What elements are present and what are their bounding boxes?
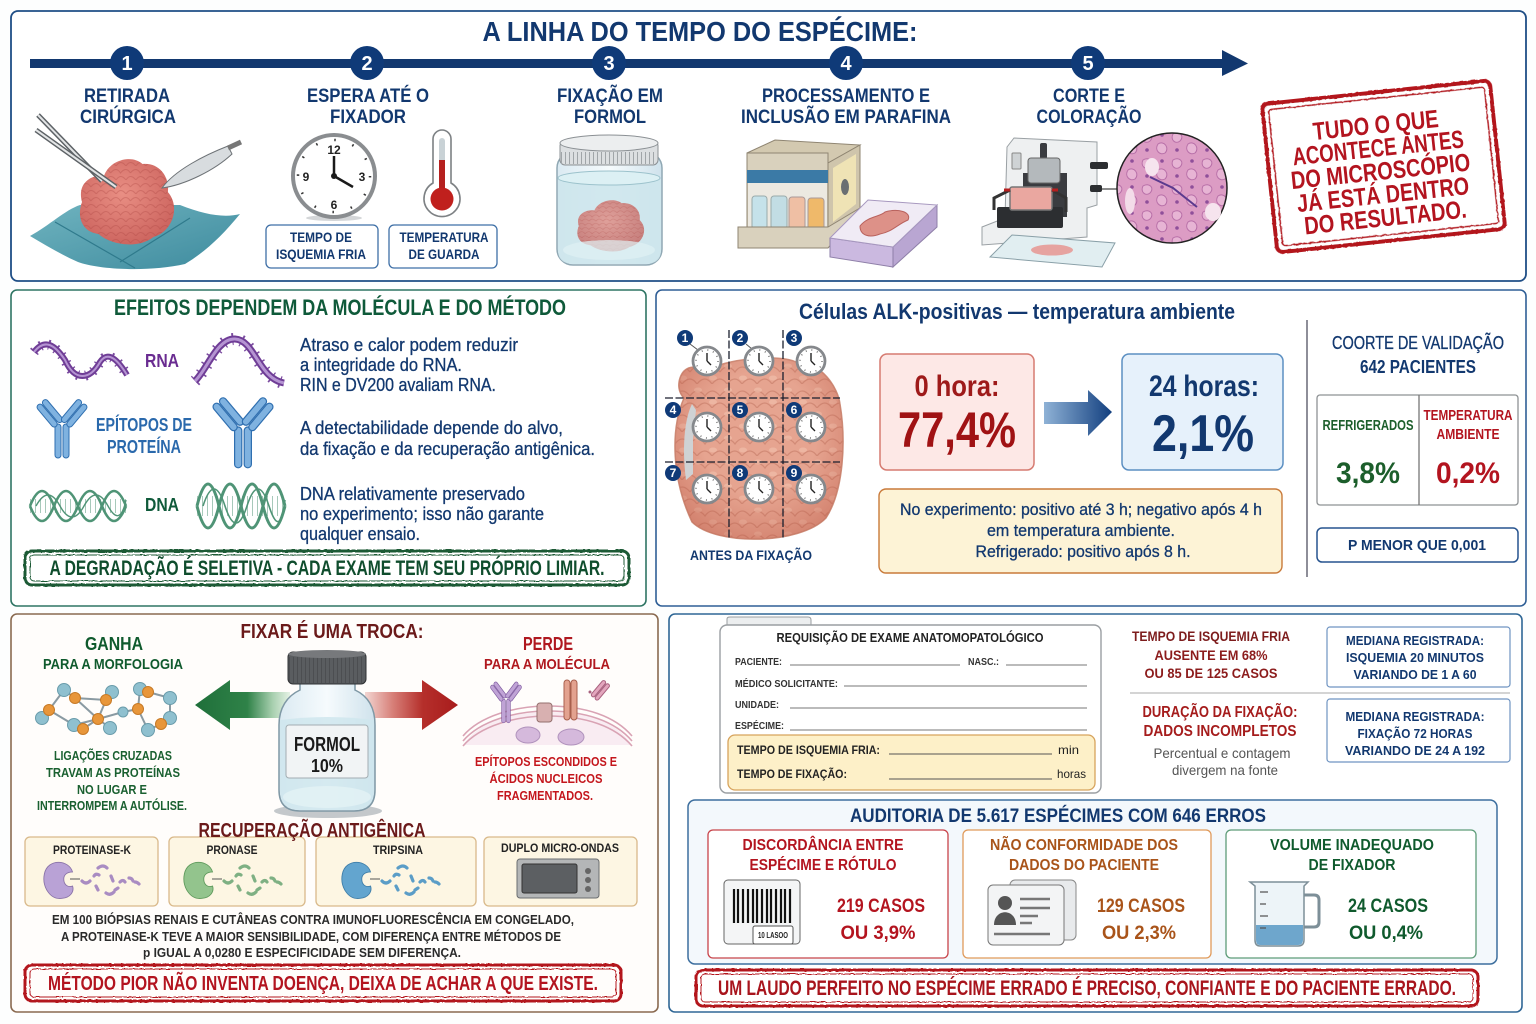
cohort table: 3,8% <box>1336 457 1400 490</box>
text: DNA <box>300 484 544 544</box>
stat: 0 hora <box>880 354 1034 470</box>
card: não conformidade <box>963 830 1211 958</box>
text: ligações cruzadas: INTERROMPEM A AUTÓLISE. <box>37 798 187 813</box>
text: ligações cruzadas: LIGAÇÕES CRUZADAS <box>54 748 172 763</box>
step 4 number: 4 <box>840 53 852 75</box>
text: study: p IGUAL A 0,0280 E ESPECIFICIDADE SEM DIFERENÇA. <box>143 945 461 960</box>
text: epítopos: A detectabilidade depende do alvo, <box>300 418 563 438</box>
arrow: red <box>365 680 458 730</box>
icon: RNA short <box>34 344 127 376</box>
card: discordância: 219 CASOS <box>837 896 925 917</box>
heading: EFEITOS DEPENDEM DA MOLÉCULA E DO MÉTODO <box>114 295 566 320</box>
banner: método pior <box>25 965 621 1001</box>
icon: formalin bottle <box>274 650 382 818</box>
text: ligações cruzadas: TRAVAM AS PROTEÍNAS <box>46 765 180 780</box>
heading: recuperação antigênica: RECUPERAÇÃO ANTIGÊNICA <box>198 818 426 842</box>
card: tripsina: TRIPSINA <box>373 843 423 857</box>
icon: microtome with slide <box>982 138 1118 267</box>
heading: ganha: GANHA <box>85 634 143 654</box>
requisition form: TEMPO DE FIXAÇÃO: <box>737 766 847 781</box>
icon: DNA short <box>30 491 126 521</box>
step 5 label: COLORAÇÃO <box>1036 106 1142 128</box>
text: isquemia ausente <box>1132 628 1290 681</box>
stat: 24 horas: 2,1% <box>1152 405 1254 463</box>
icon: tissue processor and paraffin block <box>738 140 937 267</box>
label: epítopos de proteína: EPÍTOPOS DE <box>96 414 192 435</box>
requisition form <box>720 617 1101 793</box>
note box: No experimento: positivo até 3 h; negativo após 4 h <box>900 500 1262 519</box>
card: proteinase-K <box>25 837 158 906</box>
text: epítopos escondidos: FRAGMENTADOS. <box>497 788 593 803</box>
card: duplo micro-ondas <box>484 837 637 906</box>
step 4 label: INCLUSÃO EM PARAFINA <box>741 106 951 128</box>
text: duração da fixação: DURAÇÃO DA FIXAÇÃO: <box>1142 701 1298 721</box>
step 3 number: 3 <box>603 53 615 75</box>
step 2 label: ESPERA ATÉ O <box>307 85 429 107</box>
label: epítopos de proteína: PROTEÍNA <box>107 436 181 457</box>
cohort heading <box>1332 332 1504 377</box>
text: study: A PROTEINASE-K TEVE A MAIOR SENSIBILIDADE, COM DIFERENÇA ENTRE MÉTODOS DE <box>61 929 561 944</box>
stamp callout: TUDO O QUE <box>1312 105 1440 146</box>
icon: RNA long <box>195 339 284 383</box>
text: epítopos escondidos: EPÍTOPOS ESCONDIDOS E <box>475 754 617 769</box>
text: ligações cruzadas <box>37 748 187 813</box>
label: tempo de isquemia fria <box>266 225 378 268</box>
panel: molecule effects <box>11 290 646 606</box>
card: tripsina <box>316 837 476 906</box>
audit heading: AUDITORIA DE 5.617 ESPÉCIMES COM 646 ERROS <box>850 805 1266 827</box>
stamp callout: DO RESULTADO. <box>1303 196 1468 240</box>
step 5 label <box>1036 86 1142 128</box>
step 2 number: 2 <box>361 53 373 75</box>
card: volume inadequado: 24 CASOS <box>1348 896 1428 917</box>
icon: formalin jar with tissue <box>557 135 662 265</box>
cohort table <box>1317 395 1518 505</box>
stamp callout: JÁ ESTÁ DENTRO <box>1295 171 1471 218</box>
label: RNA: RNA <box>145 351 179 371</box>
icon: cell membrane with epitopes <box>463 680 632 746</box>
card: não conformidade: OU 2,3% <box>1102 923 1176 944</box>
cohort table: REFRIGERADOS <box>1322 417 1414 434</box>
step 1 number: 1 <box>121 53 133 75</box>
text: RNA: RIN e DV200 avaliam RNA. <box>300 375 496 395</box>
banner: degradação seletiva: A DEGRADAÇÃO É SELETIVA - CADA EXAME TEM SEU PRÓPRIO LIMIAR. <box>50 556 604 580</box>
requisition form: MÉDICO SOLICITANTE: <box>735 677 838 690</box>
stat: 0 hora: 0 hora: <box>914 370 1000 403</box>
heading: Células ALK-positivas — temperatura ambiente <box>799 299 1235 324</box>
illustration: sectioned tissue with clocks: 6 <box>791 403 798 417</box>
icon: histology micrograph <box>1117 133 1227 243</box>
banner: método pior: MÉTODO PIOR NÃO INVENTA DOENÇA, DEIXA DE ACHAR A QUE EXISTE. <box>48 972 598 995</box>
text: divergência: Percentual e contagem <box>1154 745 1290 761</box>
illustration: sectioned tissue with clocks: 1 <box>682 331 689 345</box>
icon: antibody small <box>36 398 88 458</box>
step 4 number <box>829 46 863 80</box>
step 1 label: RETIRADA <box>84 86 170 107</box>
illustration: sectioned tissue with clocks <box>665 330 843 539</box>
heading: perde: PERDE <box>523 634 573 654</box>
card: duplo micro-ondas: DUPLO MICRO-ONDAS <box>501 841 619 855</box>
step 1 label: CIRÚRGICA <box>80 106 176 128</box>
label: temperatura de guarda: TEMPERATURA <box>400 229 488 245</box>
text: ligações cruzadas: NO LUGAR E <box>77 782 147 797</box>
box: mediana isquemia: VARIANDO DE 1 A 60 <box>1354 667 1476 682</box>
text: study: EM 100 BIÓPSIAS RENAIS E CUTÂNEAS CONTRA IMUNOFLUORESCÊNCIA EM CONGELADO, <box>52 912 574 927</box>
requisition form: horas <box>1057 767 1086 781</box>
step 5 label: CORTE E <box>1053 86 1125 107</box>
illustration: sectioned tissue with clocks: 5 <box>737 403 744 417</box>
step 4 label: PROCESSAMENTO E <box>762 86 930 107</box>
text: RNA: a integridade do RNA. <box>300 355 462 375</box>
p-value box: P MENOR QUE 0,001 <box>1348 537 1486 554</box>
box: mediana isquemia: ISQUEMIA 20 MINUTOS <box>1346 650 1484 665</box>
heading: ganha: PARA A MORFOLOGIA <box>43 656 183 673</box>
cohort heading: 642 PACIENTES <box>1360 357 1476 377</box>
caption: ANTES DA FIXAÇÃO <box>690 546 812 563</box>
box: mediana fixação <box>1327 699 1510 762</box>
text: divergência <box>1154 745 1290 778</box>
label: tempo de isquemia fria: ISQUEMIA FRIA <box>276 246 366 262</box>
panel: timeline <box>11 11 1526 281</box>
illustration: sectioned tissue with clocks: 3 <box>791 331 798 345</box>
step 3 label: FIXAÇÃO EM <box>557 85 663 107</box>
text: epítopos escondidos <box>475 754 617 803</box>
card: não conformidade: NÃO CONFORMIDADE DOS <box>990 834 1178 854</box>
step 5 number <box>1071 46 1105 80</box>
step 1 label <box>80 86 176 128</box>
requisition form: ESPÉCIME: <box>735 719 784 732</box>
text: divergência: divergem na fonte <box>1172 762 1278 778</box>
step 3 number <box>592 46 626 80</box>
icon: clock: 6 <box>331 198 338 212</box>
stamp callout: ACONTECE ANTES <box>1291 125 1465 171</box>
heading: FIXAR É UMA TROCA: <box>240 620 424 643</box>
card: discordância: DISCORDÂNCIA ENTRE <box>742 835 904 854</box>
box: mediana fixação: MEDIANA REGISTRADA: <box>1346 709 1484 724</box>
box: mediana fixação: VARIANDO DE 24 A 192 <box>1345 743 1485 758</box>
icon: formalin bottle: FORMOL <box>294 734 360 756</box>
text: study <box>52 912 574 960</box>
icon: antibody large <box>212 396 274 468</box>
icon: clock: 9 <box>303 170 310 184</box>
card: volume inadequado: DE FIXADOR <box>1308 857 1396 874</box>
cohort table: 0,2% <box>1436 457 1500 490</box>
heading: perde: PARA A MOLÉCULA <box>484 656 610 673</box>
card: discordância: OU 3,9% <box>840 923 916 944</box>
p-value box <box>1317 528 1518 562</box>
text: isquemia ausente: TEMPO DE ISQUEMIA FRIA <box>1132 628 1290 644</box>
text: DNA: no experimento; isso não garante <box>300 504 544 524</box>
card: proteinase-K: PROTEINASE-K <box>53 843 131 857</box>
icon: clock: 3 <box>359 170 366 184</box>
text: RNA <box>300 335 518 395</box>
card: não conformidade: 129 CASOS <box>1097 896 1185 917</box>
title: A LINHA DO TEMPO DO ESPÉCIME: <box>482 16 918 47</box>
card: não conformidade: DADOS DO PACIENTE <box>1009 857 1159 874</box>
text: epítopos: da fixação e da recuperação antigênica. <box>300 439 595 459</box>
requisition form: min <box>1058 743 1079 757</box>
requisition form: PACIENTE: <box>735 656 782 668</box>
text: epítopos <box>300 418 595 459</box>
step 2 label <box>307 85 429 128</box>
text: epítopos escondidos: ÁCIDOS NUCLEICOS <box>490 771 603 786</box>
text: RNA: Atraso e calor podem reduzir <box>300 335 518 355</box>
cohort table: TEMPERATURA <box>1424 407 1513 424</box>
requisition form: TEMPO DE ISQUEMIA FRIA: <box>737 743 880 757</box>
banner: degradação seletiva <box>25 551 629 585</box>
label: tempo de isquemia fria: TEMPO DE <box>290 229 352 245</box>
panel: records and audit <box>669 614 1522 1012</box>
cohort table: AMBIENTE <box>1436 426 1500 443</box>
divider <box>1306 320 1308 577</box>
text: isquemia ausente: AUSENTE EM 68% <box>1154 647 1268 663</box>
card: discordância <box>708 830 948 958</box>
audit box <box>688 800 1497 964</box>
icon: cross-linked molecules <box>36 682 176 736</box>
card: volume inadequado: OU 0,4% <box>1349 923 1423 944</box>
step 3 label <box>557 85 663 128</box>
panel: ALK-positive cells <box>656 290 1526 606</box>
note box: em temperatura ambiente. <box>987 521 1175 540</box>
card: pronase: PRONASE <box>206 843 258 857</box>
step 1 number <box>110 46 144 80</box>
text: isquemia ausente: OU 85 DE 125 CASOS <box>1144 665 1278 681</box>
card: pronase <box>169 837 305 906</box>
card: volume inadequado: VOLUME INADEQUADO <box>1270 837 1434 854</box>
step 4 label <box>741 86 951 128</box>
label: DNA: DNA <box>145 495 179 515</box>
arrow: timeline <box>30 50 1248 76</box>
label: epítopos de proteína <box>96 414 192 457</box>
card: discordância: ESPÉCIME E RÓTULO <box>750 855 896 874</box>
illustration: sectioned tissue with clocks: 2 <box>737 331 744 345</box>
panel: fixation trade-off <box>11 614 658 1012</box>
note box: Refrigerado: positivo após 8 h. <box>976 542 1190 561</box>
stat: 24 horas: 24 horas: <box>1149 370 1259 403</box>
stat: 24 horas <box>1122 354 1283 470</box>
icon: thermometer <box>424 130 460 217</box>
text: duração da fixação: DADOS INCOMPLETOS <box>1144 723 1297 740</box>
text: DNA: DNA relativamente preservado <box>300 484 525 504</box>
heading: ganha <box>43 634 183 673</box>
illustration: sectioned tissue with clocks: 4 <box>670 403 677 417</box>
arrow <box>1044 390 1112 436</box>
banner: laudo perfeito <box>696 970 1478 1006</box>
requisition form: NASC.: <box>968 656 999 668</box>
text: DNA: qualquer ensaio. <box>300 524 420 544</box>
illustration: sectioned tissue with clocks: 9 <box>791 466 798 480</box>
icon: DNA large <box>197 484 285 528</box>
card: volume inadequado <box>1226 830 1476 958</box>
heading: perde <box>484 634 610 673</box>
box: mediana isquemia <box>1327 627 1510 687</box>
label: temperatura de guarda: DE GUARDA <box>408 246 480 262</box>
card: discordância: 10 LASOO <box>758 931 788 940</box>
step 2 label: FIXADOR <box>330 107 406 128</box>
icon: clock: 12 <box>327 143 341 157</box>
label: temperatura de guarda <box>389 225 497 268</box>
text: duração da fixação <box>1142 701 1298 740</box>
illustration: sectioned tissue with clocks: 7 <box>670 466 677 480</box>
arrow: green <box>195 680 290 730</box>
step 2 number <box>350 46 384 80</box>
stamp callout: DO MICROSCÓPIO <box>1289 146 1472 195</box>
step 5 number: 5 <box>1082 53 1094 75</box>
stat: 0 hora: 77,4% <box>898 402 1016 458</box>
note box <box>879 489 1282 573</box>
icon: clock <box>293 135 375 221</box>
stamp callout <box>1262 80 1505 253</box>
requisition form: UNIDADE: <box>735 699 779 711</box>
illustration: sectioned tissue with clocks: 8 <box>737 466 744 480</box>
requisition form: REQUISIÇÃO DE EXAME ANATOMOPATOLÓGICO <box>776 630 1044 645</box>
step 3 label: FORMOL <box>574 107 646 128</box>
box: mediana fixação: FIXAÇÃO 72 HORAS <box>1358 726 1473 741</box>
icon: surgical tissue with forceps and scalpel <box>30 115 241 269</box>
box: mediana isquemia: MEDIANA REGISTRADA: <box>1346 633 1484 648</box>
icon: formalin bottle: 10% <box>311 756 343 776</box>
